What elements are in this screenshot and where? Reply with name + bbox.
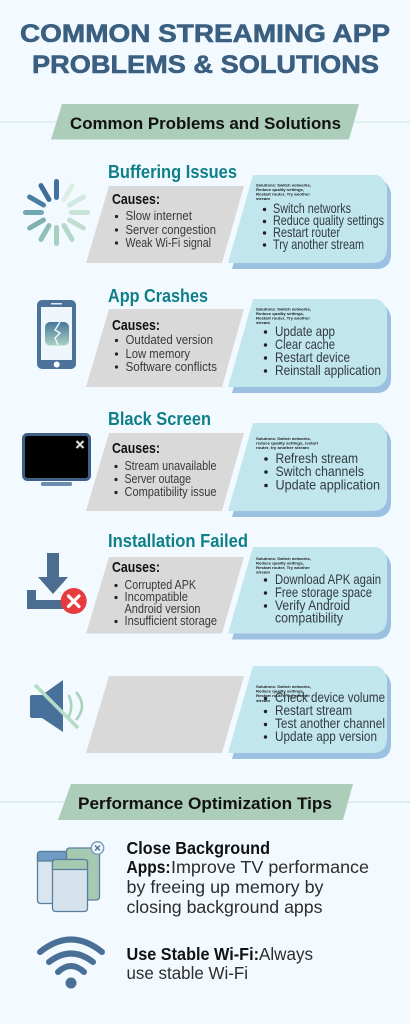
icon: tv with black screen bbox=[24, 434, 90, 486]
section banner: common problems and solutions bbox=[51, 104, 359, 140]
causes card: Stream unavailable bbox=[124, 459, 217, 473]
solutions card: Switch networks bbox=[273, 200, 351, 216]
section banner: common problems and solutions: Common Problems and Solutions bbox=[70, 115, 341, 133]
solutions card: Solutions: Switch networks, bbox=[256, 437, 311, 441]
solutions card: compatibility bbox=[275, 610, 343, 626]
tip text: Improve TV performance bbox=[171, 857, 369, 877]
icon: muted speaker bbox=[30, 680, 82, 732]
causes card: Insufficient storage bbox=[124, 614, 217, 628]
causes card: Server congestion bbox=[126, 223, 216, 237]
causes card bbox=[86, 309, 244, 387]
solutions card: Update app bbox=[275, 323, 335, 339]
causes card: Server outage bbox=[124, 472, 191, 486]
solutions card: Switch channels bbox=[276, 463, 364, 479]
causes card bbox=[86, 186, 244, 263]
solutions card bbox=[228, 547, 391, 640]
solutions card: Solutions: Switch networks, bbox=[256, 184, 311, 188]
solutions card: Solutions: Switch networks, bbox=[256, 685, 311, 689]
heading: Buffering Issues bbox=[108, 162, 237, 182]
heading: App Crashes bbox=[108, 286, 208, 306]
tip text: by freeing up memory by bbox=[126, 877, 324, 897]
panel: no sound bbox=[30, 666, 391, 759]
heading: Black Screen bbox=[108, 409, 211, 429]
solutions card: Refresh stream bbox=[276, 450, 358, 466]
solutions card: Update application bbox=[276, 476, 380, 492]
tip text bbox=[126, 944, 313, 983]
solutions card: Restart router, Try another bbox=[256, 566, 311, 570]
solutions card: Restart device bbox=[275, 349, 350, 365]
solutions card: Restart router, Try another bbox=[256, 192, 311, 196]
solutions card: stream bbox=[256, 570, 271, 574]
solutions card: Solutions: Switch networks, bbox=[256, 308, 311, 312]
solutions card bbox=[228, 175, 391, 269]
solutions card: Update app version bbox=[275, 728, 377, 744]
solutions card: Free storage space bbox=[275, 584, 372, 600]
causes card: Causes: bbox=[112, 317, 160, 334]
solutions card bbox=[228, 423, 391, 517]
title bbox=[20, 20, 390, 79]
causes card bbox=[86, 557, 244, 634]
causes card: Incompatible bbox=[124, 590, 188, 604]
section banner: performance optimization tips bbox=[58, 784, 353, 820]
panel: app crashes bbox=[37, 286, 391, 393]
panel: black screen bbox=[24, 409, 391, 517]
solutions card: Try another stream bbox=[273, 236, 364, 252]
solutions card: Restart router bbox=[273, 224, 340, 240]
solutions card: Reinstall application bbox=[275, 362, 381, 378]
solutions card: reduce quality settings, restart bbox=[256, 442, 319, 446]
causes card: Software conflicts bbox=[126, 360, 217, 374]
causes card: Corrupted APK bbox=[124, 578, 197, 592]
solutions card: Download APK again bbox=[275, 571, 381, 587]
panel: buffering issues bbox=[26, 162, 391, 269]
icon: wifi bbox=[40, 940, 102, 988]
icon: download error bbox=[27, 553, 87, 614]
solutions card: Test another channel bbox=[275, 715, 385, 731]
solutions card: Verify Android bbox=[275, 597, 350, 613]
tip: close background apps bbox=[38, 838, 369, 917]
tip text: Close Background bbox=[126, 838, 270, 858]
solutions card: Check device volume bbox=[275, 689, 385, 705]
solutions card: stream bbox=[256, 197, 271, 201]
causes card: Outdated version bbox=[126, 333, 213, 347]
causes card: Causes: bbox=[112, 191, 160, 208]
solutions card: router, try another stream bbox=[256, 446, 310, 450]
tip text: use stable Wi-Fi bbox=[126, 963, 248, 983]
solutions card: Reduce quality settings, bbox=[256, 312, 304, 316]
icon: broken phone bbox=[37, 300, 76, 369]
tip text: Always bbox=[259, 944, 313, 964]
solutions card: Reduce quality settings, bbox=[256, 188, 304, 192]
tip text: Use Stable Wi-Fi: bbox=[126, 944, 259, 964]
solutions card bbox=[228, 666, 391, 759]
causes card: Causes: bbox=[112, 440, 160, 457]
panel: installation failed bbox=[27, 531, 391, 640]
title: COMMON STREAMING APP bbox=[20, 20, 390, 48]
causes card: Android version bbox=[124, 602, 201, 616]
causes card: Causes: bbox=[112, 559, 160, 576]
causes card (empty) bbox=[86, 676, 244, 753]
solutions card: Restart router, Try another bbox=[256, 694, 311, 698]
causes card: Slow internet bbox=[126, 209, 192, 223]
tip text: closing background apps bbox=[126, 897, 323, 917]
solutions card: stream bbox=[256, 321, 271, 325]
solutions card: Restart router, Try another bbox=[256, 316, 311, 320]
causes card: Low memory bbox=[126, 347, 191, 361]
causes card bbox=[86, 433, 244, 511]
solutions card: Restart stream bbox=[275, 702, 352, 718]
tip: use stable wi-fi bbox=[40, 940, 313, 988]
solutions card: Reduce quality settings, bbox=[256, 690, 304, 694]
solutions card: Clear cache bbox=[275, 336, 335, 352]
causes card: Compatibility issue bbox=[124, 485, 217, 499]
title: PROBLEMS & SOLUTIONS bbox=[32, 51, 379, 79]
icon: app windows bbox=[38, 842, 104, 912]
solutions card: Solutions: Switch networks, bbox=[256, 557, 311, 561]
tip text bbox=[126, 838, 369, 917]
solutions card bbox=[228, 299, 391, 393]
tip text: Apps: bbox=[126, 857, 170, 877]
icon: loading spinner bbox=[26, 182, 88, 244]
causes card: Weak Wi-Fi signal bbox=[126, 236, 211, 250]
solutions card: stream bbox=[256, 699, 271, 703]
section banner: performance optimization tips: Performance Optimization Tips bbox=[78, 795, 332, 813]
heading: Installation Failed bbox=[108, 531, 248, 551]
solutions card: Reduce quality settings, bbox=[256, 562, 304, 566]
